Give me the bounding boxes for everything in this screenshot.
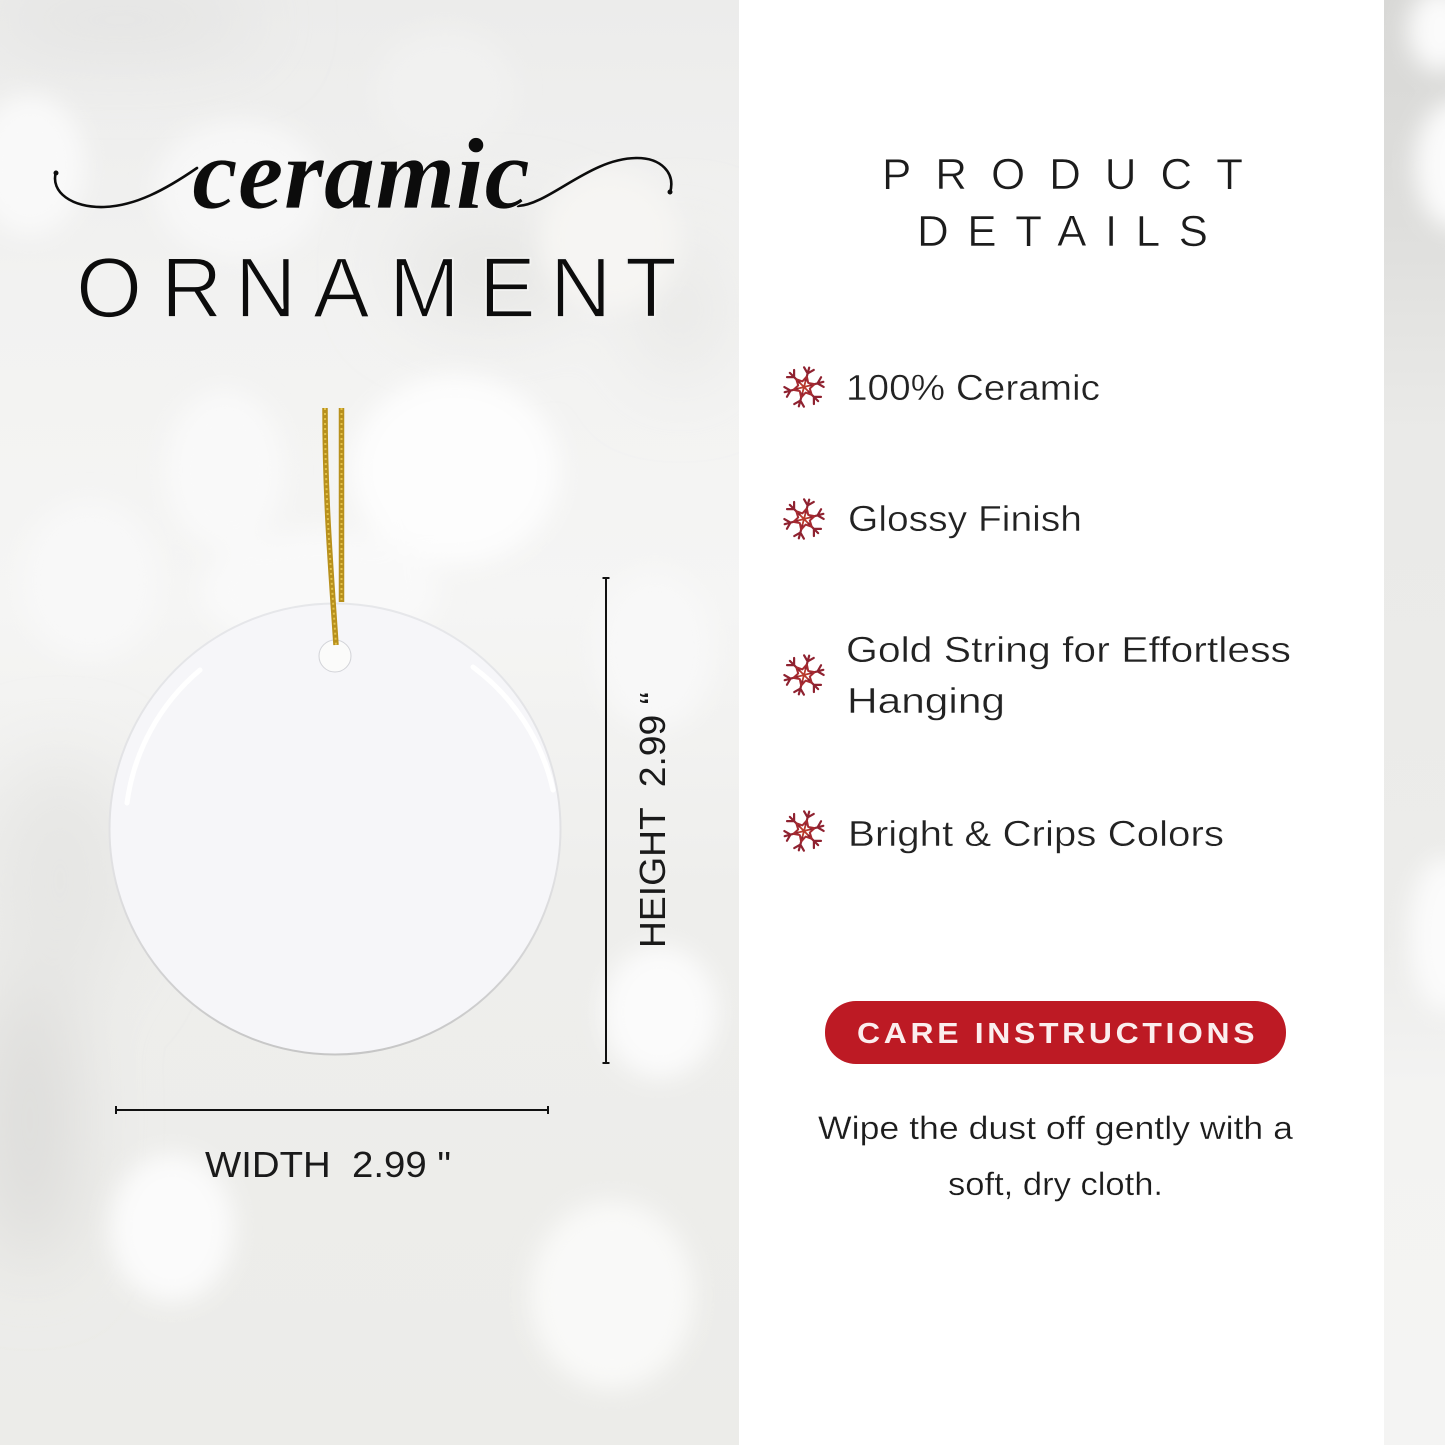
list item: gold string — [780, 629, 1291, 721]
width dimension line — [116, 1106, 548, 1114]
icon: snowflake — [780, 363, 828, 411]
list item: glossy finish: Glossy Finish — [848, 498, 1082, 539]
width label: WIDTH 2.99 " — [205, 1144, 451, 1185]
height dimension line — [602, 578, 610, 1063]
heading: product details — [882, 150, 1243, 256]
panel: white product details column — [739, 0, 1384, 1445]
icon: snowflake — [780, 651, 828, 699]
button: care instructions — [825, 1001, 1286, 1064]
list item: bright colors: Bright & Crips Colors — [848, 813, 1224, 854]
heading: ORNAMENT: ORNAMENT — [76, 241, 677, 336]
heading: product details: DETAILS — [917, 207, 1208, 256]
text: care description: Wipe the dust off gently with a — [818, 1110, 1293, 1146]
icon: gold string — [325, 408, 342, 645]
icon: snowflake — [780, 807, 828, 855]
list item: glossy finish — [780, 495, 1082, 543]
list item: bright colors — [780, 807, 1224, 855]
panel: bokeh background — [0, 0, 739, 1445]
heading: ceramic script — [54, 118, 672, 231]
icon: snowflake — [780, 495, 828, 543]
list item: gold string: Hanging — [847, 680, 1005, 721]
heading: ceramic script: ceramic — [192, 118, 530, 231]
heading: product details: PRODUCT — [882, 150, 1243, 199]
text: care description — [818, 1110, 1293, 1202]
ornament illustration — [110, 408, 560, 1054]
ornament disc — [110, 604, 560, 1054]
panel: right edge background strip — [1384, 0, 1445, 1445]
button: care instructions: CARE INSTRUCTIONS — [857, 1019, 1255, 1050]
list item: 100% ceramic — [780, 363, 1100, 411]
height label: HEIGHT 2.99 “ — [632, 692, 673, 948]
text: care description: soft, dry cloth. — [948, 1166, 1163, 1202]
list item: gold string: Gold String for Effortless — [846, 629, 1291, 670]
list item: 100% ceramic: 100% Ceramic — [846, 367, 1100, 408]
